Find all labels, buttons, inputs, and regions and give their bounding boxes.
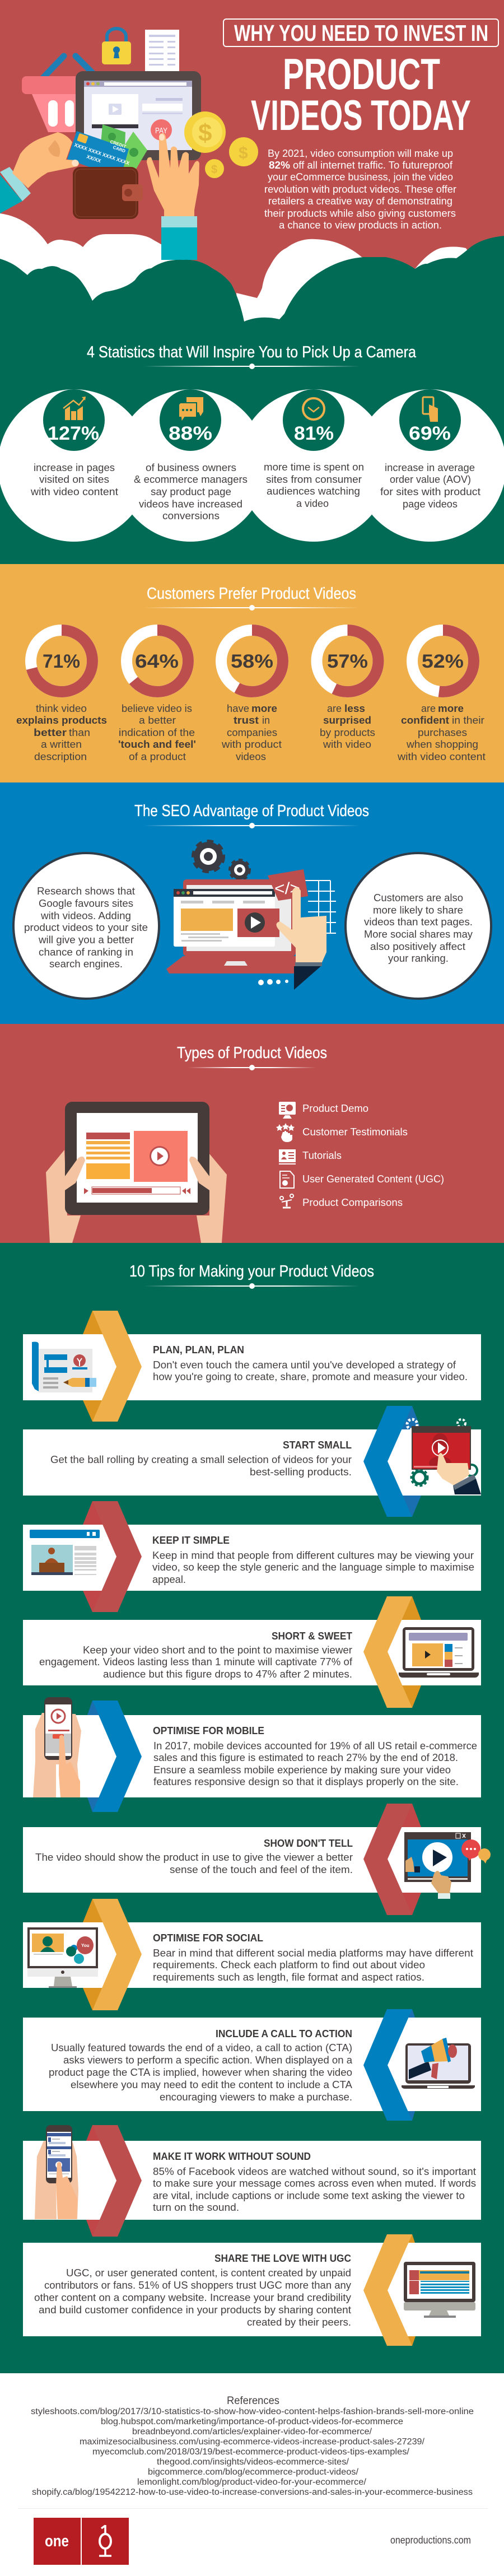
item: product demo: Product Demo	[302, 1103, 368, 1114]
item: user generated content	[280, 1171, 444, 1188]
tip 7: optimise for social	[23, 1899, 481, 2010]
donut: 57%	[317, 630, 379, 750]
callout: search ranking: will give you a better	[38, 934, 134, 945]
stat: 69%: 69%	[409, 423, 451, 444]
stat: 88%: conversions	[162, 510, 220, 521]
donut: 52%: purchases	[418, 727, 467, 738]
text: start small	[50, 1440, 352, 1478]
icon: wallet	[73, 167, 143, 219]
icon: shopping basket	[22, 56, 95, 132]
icon: laptop with browser	[166, 879, 296, 973]
stat: 88%: say product page	[151, 486, 231, 497]
text: short and sweet	[39, 1631, 353, 1680]
text: show don't tell	[35, 1838, 353, 1875]
text: start small: Get the ball rolling by creating a small selection of videos for your	[50, 1454, 352, 1465]
donut: 58%: 58%	[231, 651, 273, 672]
icon: hands	[46, 1150, 227, 1243]
donut: 57%: surprised	[323, 715, 371, 726]
text: start small: START SMALL	[283, 1440, 352, 1451]
callout: social shares	[346, 853, 491, 999]
icon: coins: $	[211, 164, 217, 176]
text: without sound: 85% of Facebook videos are watched without sound, so it's important	[153, 2166, 476, 2177]
icon: gears	[194, 842, 249, 879]
text: plan: PLAN, PLAN, PLAN	[153, 1344, 244, 1355]
stat: 81%: 81%	[294, 423, 334, 444]
text: optimise for mobile: sales and this figure is estimated to reach 27% by the end of 2018.	[153, 1752, 458, 1763]
intro text: off all internet traffic. To futureproof	[293, 160, 453, 171]
callout: search ranking: product videos to your site	[24, 922, 148, 933]
callout: social shares: your ranking.	[388, 953, 449, 964]
callout: social shares: Customers are also	[374, 892, 463, 903]
panel: 10 tips	[0, 1243, 504, 2373]
icon: grid lines	[305, 881, 336, 933]
logo: one	[34, 2518, 129, 2565]
references	[31, 2395, 474, 2497]
references: breadnbeyond.com/articles/explainer-video-for-ecommerce/	[132, 2427, 372, 2437]
text: short and sweet: Keep your video short and to the point to maximise viewer	[83, 1645, 352, 1656]
heading: SEO advantage: The SEO Advantage of Product Videos	[134, 802, 369, 820]
text: without sound: turn on the sound.	[153, 2202, 239, 2213]
donut: 71%: explains products	[16, 715, 107, 726]
text: start small: best-selling products.	[250, 1466, 352, 1478]
callout: social shares: More social shares may	[364, 929, 473, 940]
donut: 52%: more	[438, 703, 464, 714]
logo: one: one	[45, 2532, 69, 2550]
stat: 81%: sites from consumer	[266, 474, 362, 485]
text: optimise for mobile: OPTIMISE FOR MOBILE	[153, 1725, 264, 1736]
intro text: your eCommerce business, join the video	[268, 171, 453, 183]
intro text: By 2021, video consumption will make up	[268, 148, 453, 159]
text: user generated content: contributors or fans. 51% of US shoppers trust UGC more than any	[44, 2280, 351, 2291]
text: show don't tell: The video should show the product in use to give the viewer a better	[35, 1852, 353, 1863]
icon: credit card: XX/XX	[86, 153, 102, 164]
icon: browser with presenter	[30, 1530, 100, 1575]
text: call to action	[49, 2028, 353, 2103]
text: keep it simple	[152, 1535, 474, 1585]
icon: banknotes	[100, 124, 147, 174]
stat: 88%: 88%	[169, 423, 212, 444]
donut: 58%: trust	[234, 715, 259, 726]
text: without sound: to make sure your message comes across even when muted. If words	[153, 2178, 476, 2189]
icon: blueprint	[32, 1342, 96, 1392]
donut: 58%: in	[262, 715, 270, 726]
text: call to action: encouraging viewers to make a purchase.	[160, 2091, 352, 2103]
donut: 64%	[118, 630, 196, 762]
text: optimise for social: Bear in mind that different social media platforms may have different	[153, 1948, 473, 1959]
tip 10: user generated content	[23, 2234, 481, 2346]
references: myecomclub.com/2018/03/19/best-ecommerce-product-videos-tips-examples/	[92, 2447, 410, 2457]
stat: 88%	[134, 389, 248, 521]
text: user generated content	[34, 2253, 351, 2328]
text: call to action: asks viewers to perform a specific action. When displayed on a	[63, 2055, 353, 2066]
list: video types	[276, 1102, 444, 1208]
icon: code tag: </>	[274, 879, 300, 898]
intro text: a chance to view products in action.	[279, 220, 442, 231]
icon: thumbs	[65, 1157, 209, 1190]
icon: video window with reactions	[404, 1832, 491, 1899]
text: optimise for social: OPTIMISE FOR SOCIAL	[153, 1932, 263, 1944]
stat: 69%	[380, 389, 480, 510]
donut: 57%: less	[344, 703, 365, 714]
intro text: retailers a creative way of demonstrating	[268, 195, 452, 207]
stat: 81%	[264, 389, 364, 509]
tip 5: optimise for mobile	[23, 1697, 481, 1812]
text: short and sweet: audience but this figure drops to 47% after 2 minutes.	[103, 1669, 352, 1680]
icon: desktop with social: You	[81, 1943, 90, 1948]
callout: social shares: also positively affect	[370, 941, 465, 952]
stat circles	[0, 389, 504, 542]
icon: code tag	[268, 869, 308, 901]
text: call to action: INCLUDE A CALL TO ACTION	[216, 2028, 352, 2039]
text: without sound	[153, 2151, 476, 2213]
stat: 127%: visited on sites	[39, 474, 109, 485]
icon: phone in hand	[33, 1697, 81, 1797]
donut: 57%: 57%	[327, 651, 368, 672]
callout: search ranking	[13, 853, 159, 999]
heading: types: Types of Product Videos	[177, 1044, 327, 1062]
text: call to action: Usually featured towards the end of a video, a call to action (CTA)	[51, 2042, 352, 2053]
donut: 71%: 71%	[43, 651, 80, 672]
intro text: revolution with product videos. These offer	[264, 184, 456, 195]
tip 9: without sound	[23, 2125, 481, 2237]
donut: 58%: with product	[221, 739, 282, 750]
icon: tablet with checkout: PAY	[155, 126, 167, 136]
icon: dots	[258, 979, 288, 985]
text: optimise for mobile: Ensure a seamless mobile experience by making sure your video	[153, 1764, 451, 1776]
donut: 52%: are	[421, 703, 436, 714]
panel: types of product videos	[0, 1024, 504, 1243]
title: product videos today: PRODUCT	[283, 49, 440, 99]
stat: 69%: order value (AOV)	[390, 474, 471, 485]
callout: search ranking: chance of ranking in	[39, 947, 133, 958]
icon: pointing hand	[276, 887, 326, 990]
text: show don't tell: SHOW DON'T TELL	[264, 1838, 353, 1849]
icon: credit card: CREDIT	[109, 139, 127, 150]
text: plan	[153, 1344, 468, 1382]
donut: 71%: think video	[36, 703, 87, 714]
text: show don't tell: sense of the touch and feel of the item.	[170, 1864, 353, 1875]
references: maximizesocialbusiness.com/using-ecommerce-videos-increase-product-sales-27239/	[80, 2437, 425, 2447]
references: References	[227, 2395, 279, 2407]
website: oneproductions.com	[390, 2535, 471, 2546]
icon: laptop with megaphone	[402, 2038, 475, 2089]
text: keep it simple: Keep in mind that people from different cultures may be viewing your	[152, 1550, 474, 1561]
item: product comparisons: Product Comparisons	[302, 1197, 403, 1208]
donut: 57%: with video	[323, 739, 371, 750]
stat: 88%: of business owners	[146, 462, 236, 473]
callout: search ranking: Research shows that	[37, 886, 135, 897]
callout: social shares: more likely to share	[373, 905, 463, 916]
text: without sound: are vital, include captions or include some text asking the viewer to	[153, 2190, 465, 2201]
text: optimise for mobile	[153, 1725, 477, 1787]
heading: customers prefer: Customers Prefer Product Videos	[147, 585, 356, 603]
references: bigcommerce.com/blog/ecommerce-product-videos/	[148, 2467, 359, 2477]
text: user generated content: SHARE THE LOVE WITH UGC	[214, 2253, 351, 2264]
tip 6: show don't tell	[23, 1804, 491, 1915]
panel: statistics	[0, 236, 504, 564]
text: short and sweet: SHORT & SWEET	[272, 1631, 352, 1642]
donut: 57%: by products	[320, 727, 375, 738]
donut: 71%: description	[34, 751, 87, 762]
stat: 81%: more time is spent on	[264, 462, 364, 473]
title: product videos today	[251, 49, 471, 139]
icon: desktop with social	[27, 1927, 98, 1988]
text: optimise for social: requirements such as length, file format and aspect ratios.	[153, 1972, 424, 1983]
text: short and sweet: engagement. Videos lasting less than 1 minute will captivate 77% of	[39, 1656, 353, 1667]
donut: 58%: videos	[236, 751, 266, 762]
text: user generated content: UGC, or user generated content, is content created by unpaid	[66, 2267, 351, 2279]
text: without sound: MAKE IT WORK WITHOUT SOUND	[153, 2151, 311, 2162]
text: optimise for social: requirements. Check each platform to find out about video	[153, 1959, 425, 1971]
icon: receipt	[145, 30, 179, 72]
icon: monitor with web page	[404, 2262, 475, 2318]
icon: credit card: XXXX XXXX XXXX XXXX	[73, 142, 130, 166]
text: plan: how you're going to create, share, promote and measure your video.	[153, 1371, 468, 1382]
panel: footer	[0, 2373, 504, 2576]
item: customer testimonials	[276, 1123, 408, 1142]
icon: coins: $	[239, 144, 248, 162]
icon: laptop with playlist	[399, 1627, 479, 1678]
donut: 58%: more	[251, 703, 277, 714]
donut: 71%: a written	[41, 739, 82, 750]
references: lemonlight.com/blog/product-video-for-your-ecommerce/	[137, 2477, 367, 2487]
text: plan: Don't even touch the camera until you've developed a strategy of	[153, 1359, 456, 1371]
heading: 10 tips: 10 Tips for Making your Product Videos	[129, 1263, 374, 1280]
icon: coins	[184, 111, 258, 178]
intro text: 82%	[269, 160, 290, 171]
tip 8: call to action	[23, 2009, 481, 2121]
stat: 69%: increase in average	[385, 462, 475, 473]
stat: 127%	[30, 389, 118, 497]
donut: 64%: indication of the	[119, 727, 195, 738]
icon: phone with feed	[35, 2125, 78, 2219]
donut: 64%: a better	[139, 715, 176, 726]
text: user generated content: other content on a company website. Increase your brand credibility	[34, 2292, 351, 2303]
icon: padlock	[102, 29, 131, 64]
stat: 127%: 127%	[48, 423, 99, 444]
callout: search ranking: search engines.	[49, 958, 123, 970]
references: styleshoots.com/blog/2017/3/10-statistics-to-show-how-video-content-helps-fashion-brands-sell-more-online	[31, 2407, 474, 2416]
donut: 71%: than	[69, 727, 90, 738]
text: call to action: product page the CTA is implied, however when sharing the video	[49, 2067, 352, 2078]
text: user generated content: created by their peers.	[247, 2317, 351, 2328]
tip 2: start small	[23, 1406, 481, 1517]
item: tutorials	[279, 1149, 342, 1164]
intro text: their products while also giving customers	[264, 208, 456, 219]
donut: 52%: when shopping	[406, 739, 478, 750]
donut: 58%: companies	[227, 727, 277, 738]
text: optimise for social	[153, 1932, 473, 1983]
illustration: tablet	[65, 1102, 209, 1215]
stat: 81%: a video	[296, 498, 329, 509]
references: thegood.com/insights/videos-ecommerce-sites/	[157, 2457, 349, 2467]
icon: left hand holding card	[0, 132, 79, 213]
icon: coins: $	[198, 119, 212, 147]
donut: 71%: better	[34, 727, 67, 738]
panel: hero	[0, 0, 504, 336]
stat: 88%: & ecommerce managers	[134, 474, 248, 485]
heading: statistics: 4 Statistics that Will Inspire You to Pick Up a Camera	[87, 343, 417, 361]
donut: 64%: of a product	[129, 751, 186, 762]
callout: search ranking: Google favours sites	[39, 898, 133, 909]
text: optimise for mobile: In 2017, mobile devices accounted for 19% of all US retail e-commerce	[153, 1740, 477, 1752]
item: tutorials: Tutorials	[302, 1150, 342, 1161]
tip 1: plan	[23, 1311, 481, 1422]
stat: 88%: videos have increased	[139, 499, 242, 510]
donut: 52%: confident	[401, 715, 449, 726]
donut: 58%: have	[227, 703, 249, 714]
donut: 52%: in their	[452, 715, 484, 726]
item: product comparisons	[280, 1194, 403, 1208]
tip 3: keep it simple	[23, 1501, 481, 1612]
text: keep it simple: video, so keep the style generic and the language simple to maximise	[152, 1562, 474, 1573]
tip 4: short and sweet	[23, 1596, 481, 1708]
stat: 127%: increase in pages	[34, 462, 115, 473]
panel: customers prefer product videos	[0, 564, 504, 782]
donut: 52%	[397, 630, 486, 762]
intro text	[264, 148, 456, 231]
item: user generated content: User Generated Content (UGC)	[302, 1173, 444, 1185]
donut: 64%: 'touch and feel'	[118, 739, 196, 750]
text: keep it simple: appeal.	[152, 1574, 186, 1585]
donut: 57%: are	[327, 703, 342, 714]
stat: 69%: page videos	[403, 499, 458, 510]
icon: credit card	[67, 131, 130, 178]
donut: 58%	[221, 630, 283, 762]
item: customer testimonials: Customer Testimonials	[302, 1126, 408, 1138]
icon: tablet with checkout	[76, 71, 201, 160]
icon: video window and hand	[407, 1419, 481, 1494]
stat: 69%: for sites with product	[380, 486, 480, 497]
stat: 127%: with video content	[30, 486, 118, 497]
donut: 52%: 52%	[422, 651, 464, 672]
item: product demo	[279, 1102, 368, 1119]
donut: 71%	[16, 630, 107, 762]
donut: 64%: believe video is	[122, 703, 192, 714]
references: shopify.ca/blog/19542212-how-to-use-video-to-increase-conversions-and-sales-in-your-ecommerce-business	[32, 2488, 473, 2497]
panel: SEO advantage	[0, 782, 504, 1024]
text: call to action: elsewhere you may need to edit the content to include a CTA	[71, 2079, 352, 2090]
icon: right hand pointing	[147, 133, 199, 260]
callout: search ranking: with videos. Adding	[40, 910, 131, 921]
donut: 52%: with video content	[397, 751, 486, 762]
text: optimise for mobile: features responsive design so that it displays properly on the site.	[153, 1776, 459, 1787]
text: user generated content: and build customer confidence in your products by sharing content	[39, 2304, 351, 2316]
callout: social shares: videos than text pages.	[364, 916, 473, 928]
icon: credit card: CARD	[112, 145, 126, 153]
references: blog.hubspot.com/marketing/importance-of-product-videos-for-ecommerce	[101, 2417, 403, 2426]
text: keep it simple: KEEP IT SIMPLE	[152, 1535, 230, 1546]
donut: 64%: 64%	[135, 651, 179, 672]
stat: 81%: audiences watching	[267, 486, 360, 497]
